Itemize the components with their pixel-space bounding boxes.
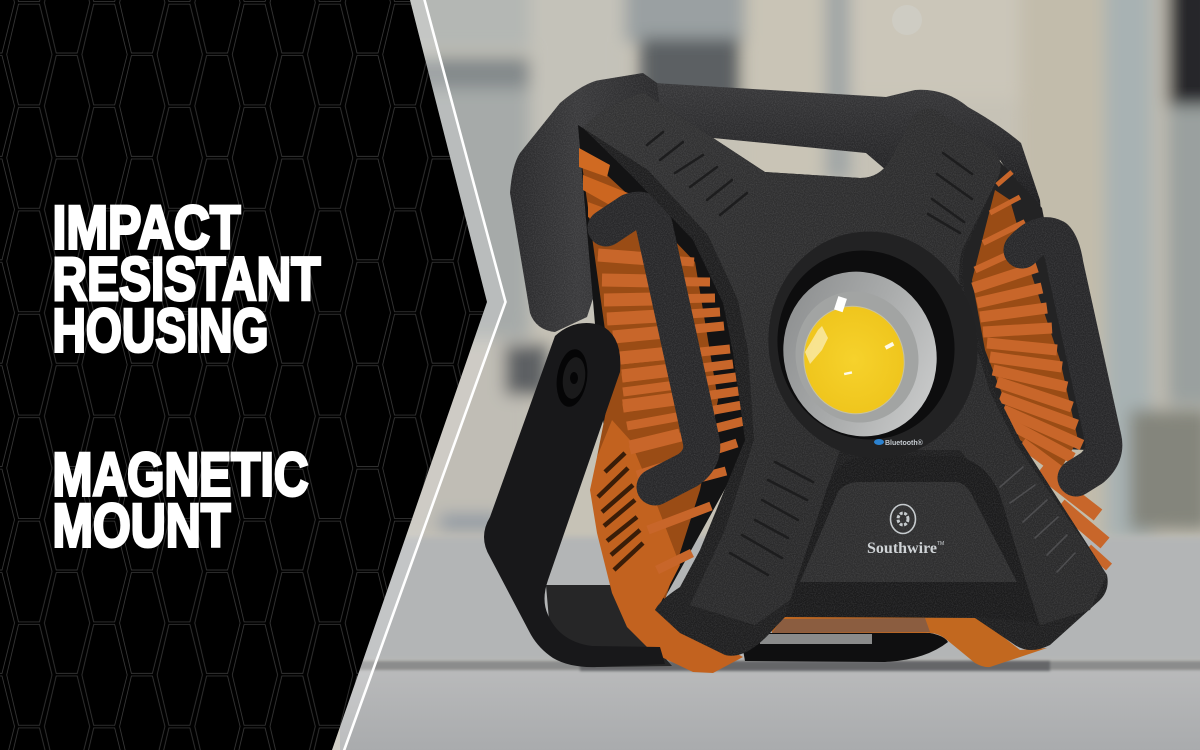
- southwire logo: Southwire: [867, 540, 937, 557]
- heading: impact resistant housing: IMPACT: [52, 194, 240, 262]
- heading: impact resistant housing: HOUSING: [52, 296, 268, 364]
- yellow LED panel: [792, 296, 916, 424]
- right orange foot: [772, 615, 1047, 667]
- bottom logo panel: [785, 456, 1040, 628]
- heading: impact resistant housing: RESISTANT: [52, 245, 320, 313]
- lens assembly: [745, 209, 1001, 481]
- right cooling fins: [973, 172, 1109, 567]
- heading: magnetic mount: MAGNETIC: [52, 440, 308, 508]
- left grab handle: [606, 210, 702, 487]
- left heat-sink body: [580, 150, 743, 673]
- grip ribs on housing arms: [647, 132, 1075, 575]
- work light product: [484, 73, 1109, 673]
- right heat-sink body: [972, 190, 1078, 470]
- stand: rear bar behind the light: [546, 585, 948, 667]
- southwire logo: [867, 504, 944, 557]
- main housing: [583, 92, 1108, 656]
- left side dark backing: [578, 125, 752, 612]
- rear frame and top handle: [510, 73, 1042, 332]
- right side backing: [950, 145, 1088, 450]
- bluetooth label: Bluetooth®: [885, 439, 924, 447]
- right grab handle: [1022, 236, 1104, 478]
- stand: folding arm with pivot: [484, 323, 665, 667]
- heading: magnetic mount: [52, 440, 308, 560]
- heading: magnetic mount: MOUNT: [52, 492, 230, 560]
- floor shadow under the light: [580, 661, 1050, 671]
- panel: black chevron with hexagon pattern: [0, 0, 506, 750]
- bluetooth label: [874, 439, 924, 447]
- heading: impact resistant housing: [52, 194, 320, 364]
- left cooling fins: [579, 148, 744, 570]
- southwire logo: TM: [937, 541, 944, 547]
